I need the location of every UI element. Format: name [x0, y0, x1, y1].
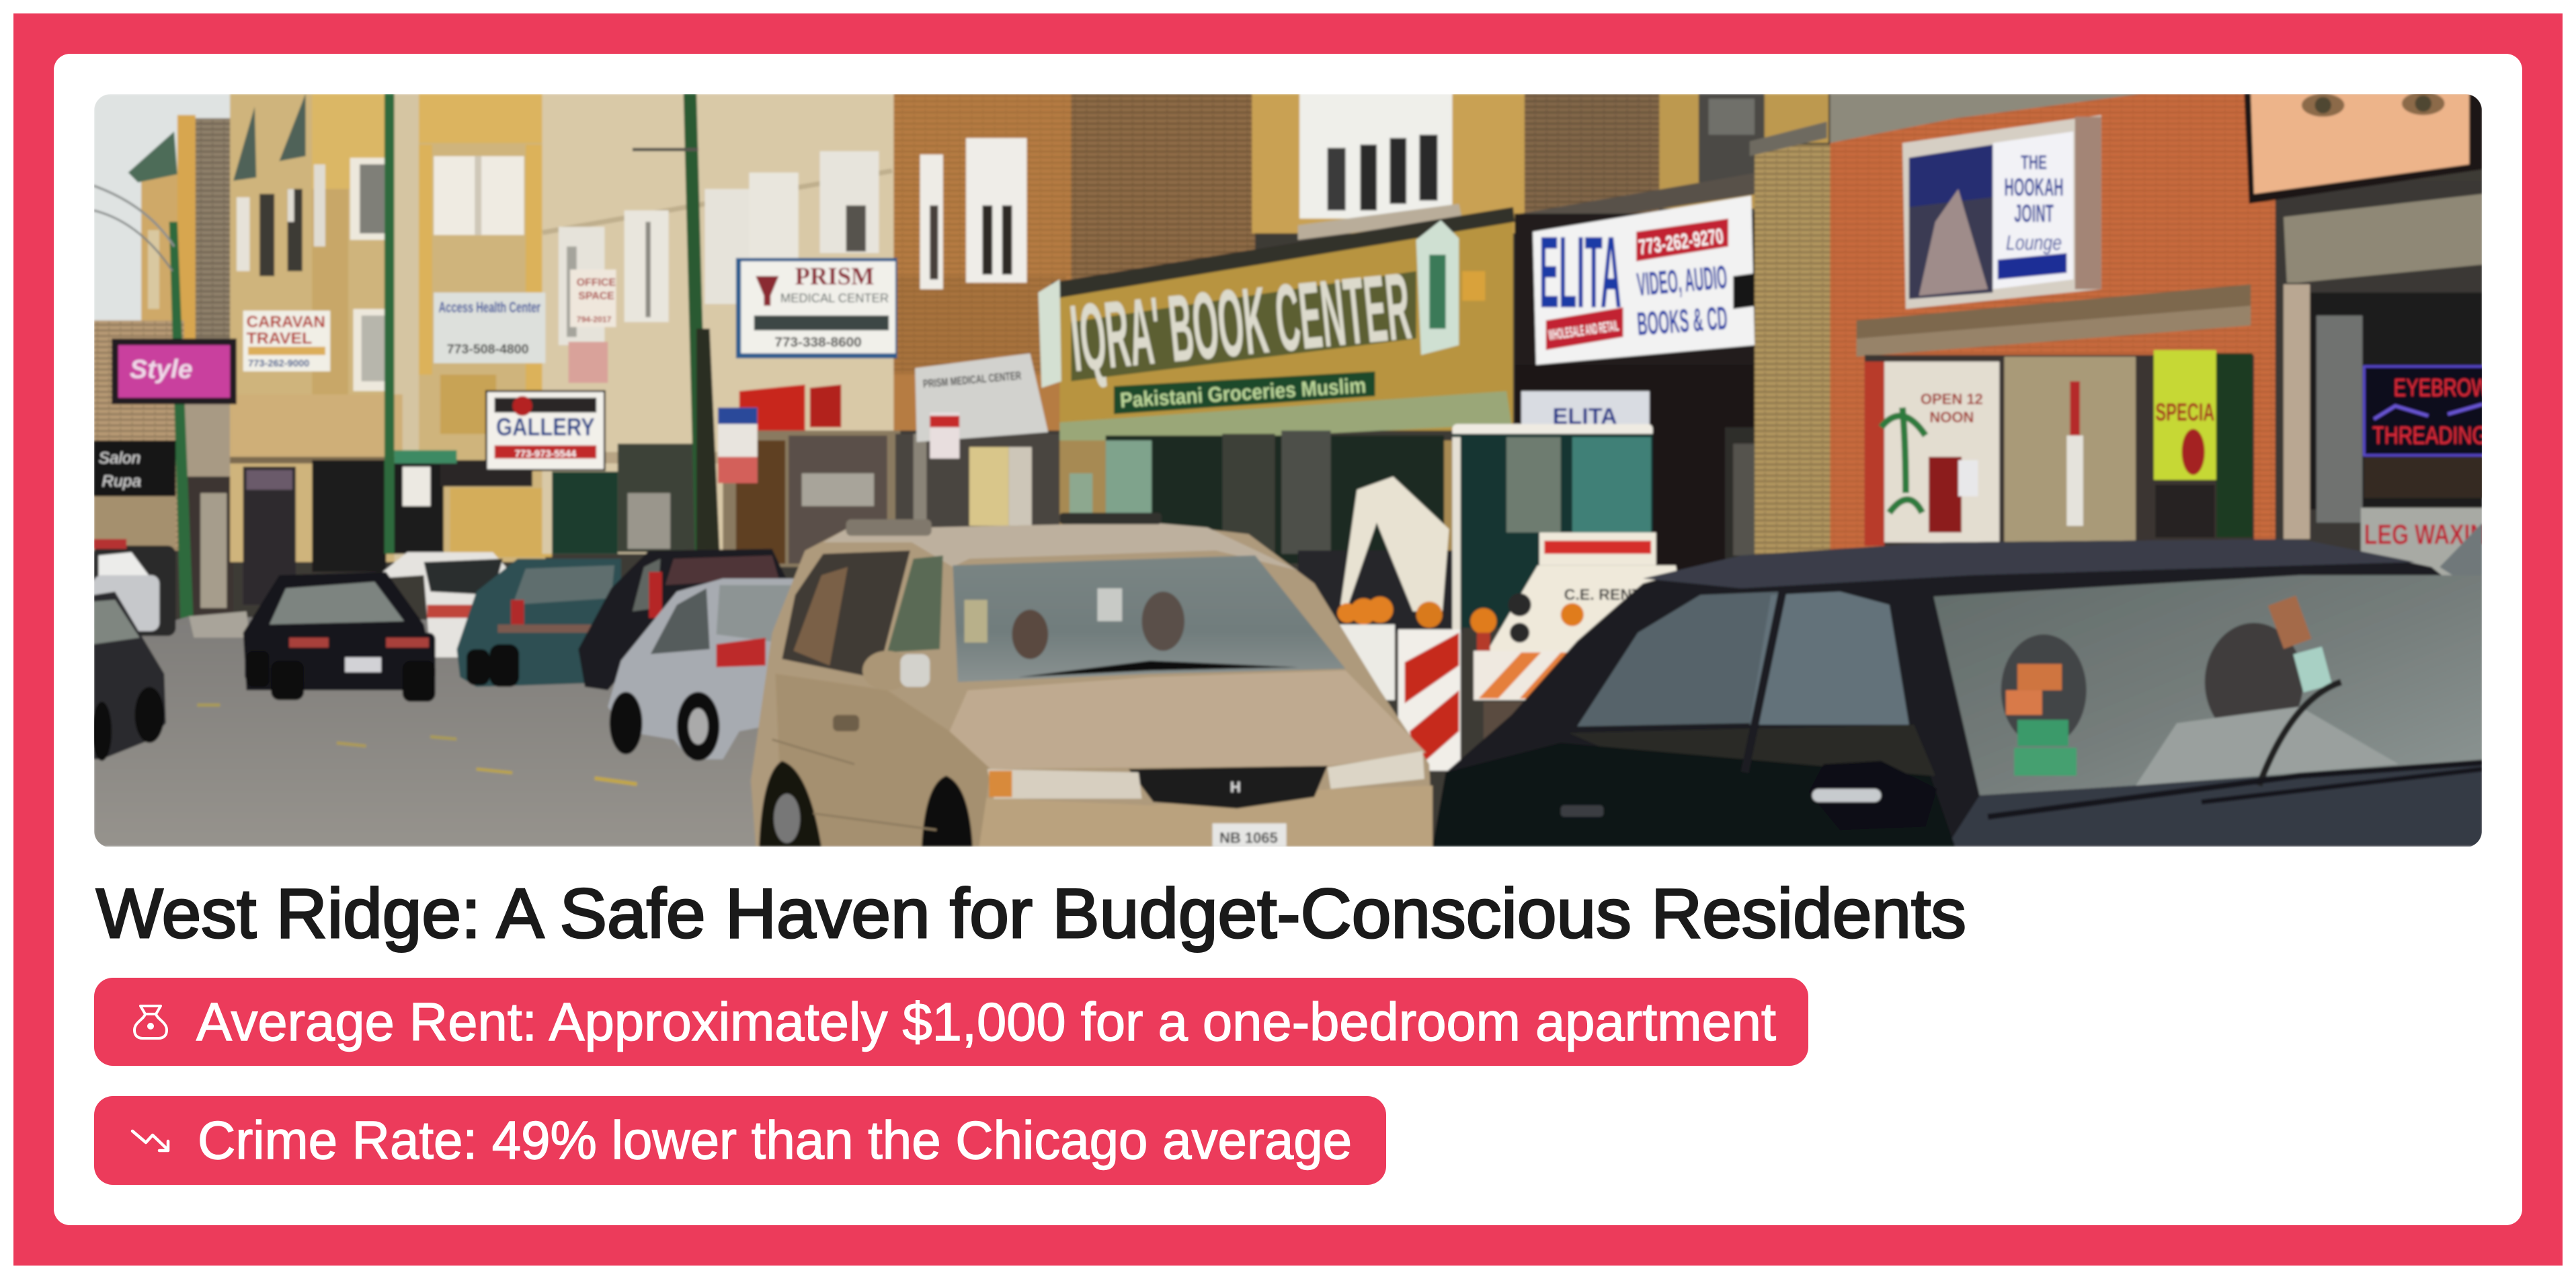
- right-hand shopfront and billboard: [2244, 92, 2489, 577]
- Elita storefront: 773-262-9270: [1637, 223, 1725, 260]
- small signs on the left: Rupa: [102, 472, 141, 490]
- orange warning lights and barricades: [1337, 595, 1653, 771]
- small signs on the left: 773-508-4800: [447, 342, 529, 356]
- orange brick shop: Hookah Joint: JOINT: [2014, 200, 2054, 227]
- black sedan foreground: [1433, 539, 2483, 847]
- Prism Medical Center sign: PRISM: [795, 262, 875, 290]
- cream building: [542, 93, 900, 567]
- small signs on the left: OFFICE: [577, 277, 616, 288]
- callout: average rent: [94, 978, 1808, 1066]
- black sedan: [243, 572, 436, 702]
- excavator and rental generator: [1298, 424, 1684, 674]
- photo: West Ridge street scene: [92, 92, 2489, 847]
- road and sidewalk: [93, 611, 772, 847]
- street poles: [93, 93, 719, 633]
- Elita storefront: VIDEO, AUDIO: [1636, 259, 1728, 303]
- small signs on the left: Style: [130, 355, 193, 384]
- Iqra Book Center storefront: Pakistani Groceries Muslim: [1119, 373, 1367, 412]
- orange brick shop: Hookah Joint: NOON: [1929, 409, 1974, 426]
- dark SUV: [578, 549, 789, 690]
- small signs on the left: Access Health Center: [439, 299, 540, 315]
- tan minivan: NB 1065: [1219, 830, 1278, 847]
- small signs on the left: Salon: [99, 449, 140, 467]
- Prism Medical Center sign: 773-338-8600: [774, 335, 862, 350]
- Prism Medical grey sign: [915, 353, 1048, 459]
- Iqra Book Center storefront: [1039, 207, 1515, 564]
- orange brick shop: Hookah Joint: [1830, 93, 2287, 551]
- yellow corner building: [230, 93, 552, 605]
- orange brick shop: Hookah Joint: SPECIA: [2155, 399, 2214, 426]
- orange brick shop: Hookah Joint: HOOKAH: [2005, 173, 2064, 201]
- title: West Ridge: A Safe Haven for Budget-Conscious Residents: [96, 875, 1966, 953]
- right-hand shopfront and billboard: EYEBROW: [2394, 374, 2489, 401]
- small signs on the left: SPACE: [578, 290, 614, 302]
- left parked cars: [92, 539, 175, 761]
- small signs on the left: [93, 270, 758, 496]
- tan brick column: [1750, 122, 1835, 559]
- rent text: Average Rent: Approximately $1,000 for a one-bedroom apartment: [196, 992, 1776, 1052]
- icon: trending down arrow: [132, 1131, 168, 1151]
- orange brick shop: Hookah Joint: OPEN 12: [1921, 391, 1983, 408]
- tan minivan: [751, 512, 1433, 847]
- right-hand shopfront and billboard: THREADING: [2372, 422, 2487, 449]
- teal van: [456, 559, 621, 687]
- Elita storefront: [1515, 196, 1765, 584]
- tan minivan: H: [1230, 779, 1241, 796]
- orange brick shop: Hookah Joint: THE: [2021, 152, 2047, 174]
- orange brick building: [893, 93, 1255, 533]
- icon: money bag: [134, 1006, 167, 1038]
- orange brick shop: Hookah Joint: Lounge: [2006, 230, 2062, 254]
- Prism Medical Center sign: MEDICAL CENTER: [780, 291, 889, 305]
- small signs on the left: CARAVAN: [247, 313, 325, 331]
- excavator and rental generator: C.E. RENTAL: [1564, 586, 1661, 603]
- crime text: Crime Rate: 49% lower than the Chicago average: [198, 1110, 1352, 1170]
- right-hand shopfront and billboard: LEG WAXIN: [2364, 518, 2486, 550]
- white SUV: [374, 552, 506, 658]
- callout: crime rate: [94, 1096, 1386, 1185]
- small signs on the left: 794-2017: [577, 315, 612, 324]
- small signs on the left: 773-262-9000: [248, 358, 309, 369]
- Elita storefront: ELITA: [1552, 404, 1617, 430]
- yellow brick upper floors: [1252, 93, 1828, 240]
- sky: [94, 94, 232, 323]
- small signs on the left: GALLERY: [496, 414, 595, 441]
- Elita storefront: ELITA: [1539, 216, 1621, 330]
- Elita storefront: BOOKS & CD: [1636, 300, 1728, 343]
- silver sedan: [608, 578, 799, 761]
- far-left building: [93, 115, 233, 616]
- Prism Medical grey sign: PRISM MEDICAL CENTER: [922, 369, 1022, 391]
- right van glimpse: [2440, 522, 2483, 595]
- Elita storefront: WHOLESALE AND RETAIL: [1547, 317, 1619, 344]
- photo: West Ridge street scene: IQRA' BOOK CENTER: [1066, 254, 1415, 392]
- Prism Medical Center sign: [736, 258, 897, 358]
- small signs on the left: 773-973-5544: [515, 449, 577, 459]
- small signs on the left: TRAVEL: [247, 330, 312, 348]
